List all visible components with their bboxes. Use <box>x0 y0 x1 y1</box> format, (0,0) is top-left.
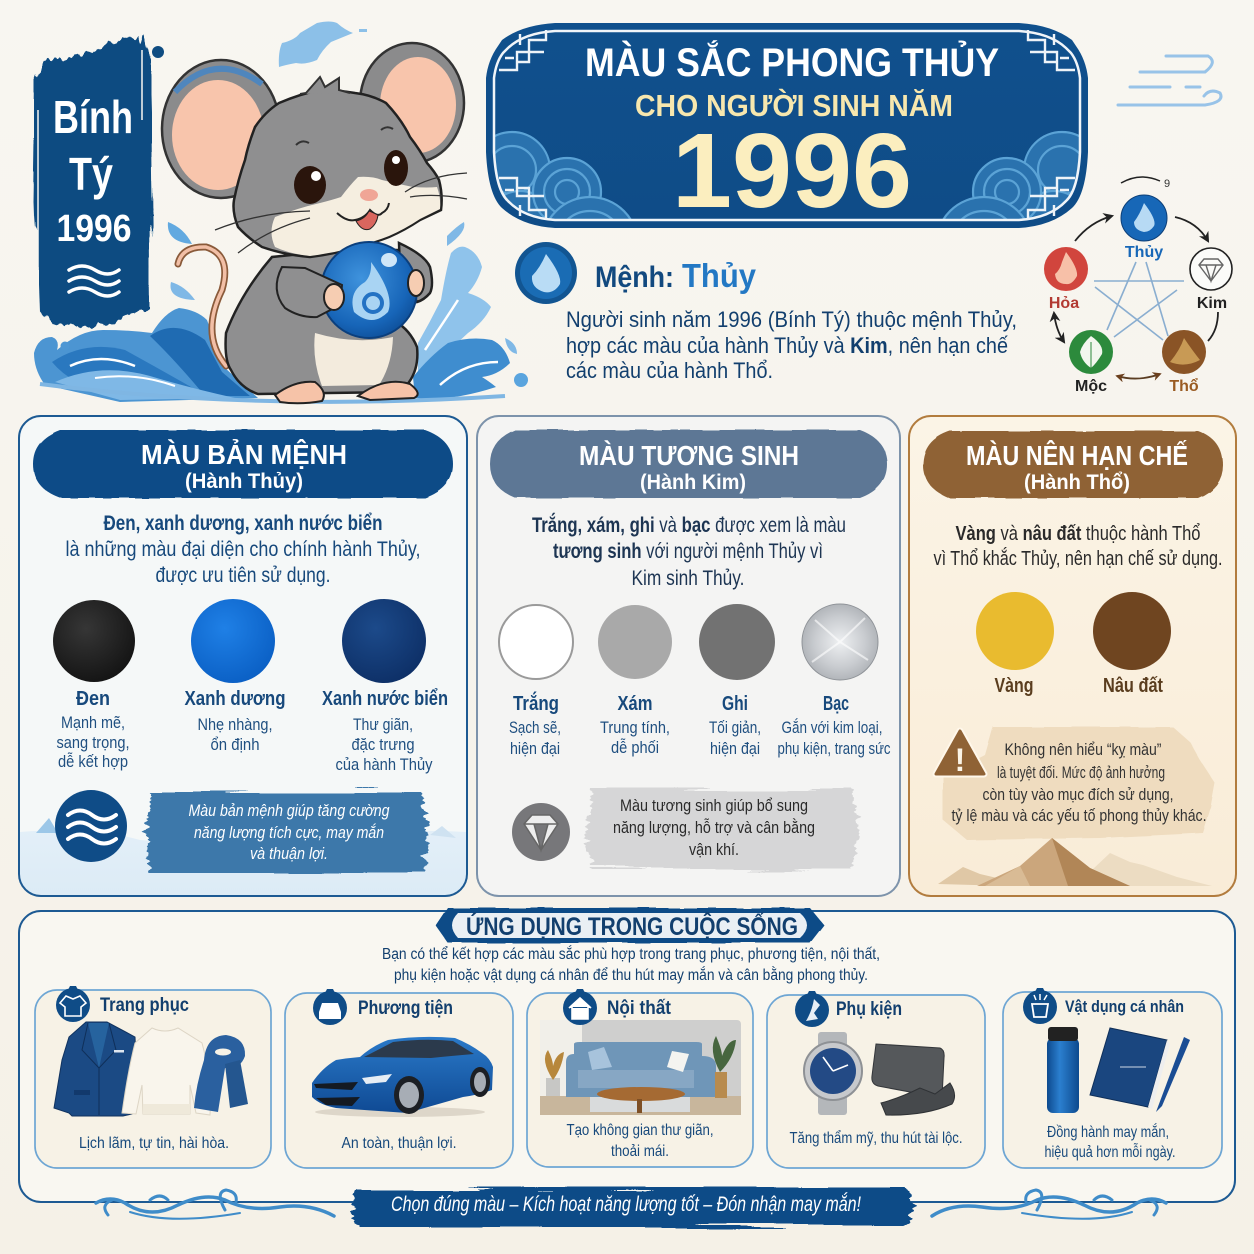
heading <box>490 430 887 498</box>
star lines <box>1094 262 1184 340</box>
card: phụ kiện: Phụ kiện <box>836 999 902 1020</box>
title banner: MÀU SẮC PHONG THỦY <box>585 39 999 85</box>
brows <box>296 127 393 145</box>
heading: (Hành Kim) <box>640 471 746 494</box>
title banner: 1996 <box>672 112 912 230</box>
right arm <box>399 243 432 302</box>
callout: Không nên hiểu “kỵ màu” <box>1004 741 1162 759</box>
wallet <box>872 1044 944 1098</box>
swatch: Vàng <box>976 592 1054 697</box>
swatch: Xám: Xám <box>618 693 652 715</box>
cloud pattern <box>495 130 1079 219</box>
corner frets <box>499 30 1075 220</box>
swatch: Xanh nước biển: đặc trưng <box>352 735 414 754</box>
menh Thuy block: Mệnh: <box>595 261 674 294</box>
icon: house <box>563 989 597 1025</box>
icon: mountains <box>938 838 1212 886</box>
panel: ứng dụng trong cuộc sống <box>19 908 1235 1202</box>
callout: là tuyệt đối. Mức độ ảnh hưởng <box>997 764 1165 782</box>
paragraph: Người sinh năm 1996 (Bính Tý) thuộc mệnh Thủy, <box>566 307 1017 332</box>
text block: là những màu đại diện cho chính hành Thủy, <box>66 538 420 561</box>
icon: warning <box>936 731 984 778</box>
card: nội thất <box>527 989 753 1167</box>
icon: shirt <box>56 986 90 1022</box>
paragraph: hợp các màu của hành Thủy và Kim, nên hạn chế <box>566 333 1008 358</box>
element: Kim <box>1190 248 1232 312</box>
cycle arrows <box>1054 216 1218 379</box>
paragraph <box>566 307 1017 383</box>
callout: tỷ lệ màu và các yếu tố phong thủy khác. <box>952 807 1206 825</box>
element: Hỏa <box>1044 247 1088 312</box>
footer scroll left <box>96 1190 334 1219</box>
swatch: Vàng: Vàng <box>994 675 1034 697</box>
paws <box>275 267 424 403</box>
card: nội thất: thoải mái. <box>611 1143 669 1160</box>
bottle <box>1047 1027 1079 1113</box>
callout <box>586 788 858 868</box>
notebook <box>1090 1028 1170 1109</box>
element: Thổ: Thổ <box>1169 377 1199 395</box>
swatch: Trắng: Sạch sẽ, <box>509 718 561 737</box>
swatch: Xám <box>598 605 672 757</box>
heading: (Hành Thổ) <box>1024 471 1130 494</box>
text block <box>66 512 420 587</box>
swatch: Đen: dễ kết hợp <box>58 752 128 771</box>
card: nội thất: Nội thất <box>607 998 672 1019</box>
swatch: Xanh nước biển: của hành Thủy <box>336 755 433 774</box>
paragraph: các màu của hành Thổ. <box>566 358 773 383</box>
swatch: Xanh nước biển: Thư giãn, <box>353 715 413 734</box>
top mark <box>1121 177 1160 183</box>
swatch: Ghi: Ghi <box>722 693 748 715</box>
swatch: Ghi: hiện đại <box>710 739 760 758</box>
ears <box>162 43 464 198</box>
panel: màu tương sinh <box>477 416 900 896</box>
five elements diagram <box>1044 177 1232 395</box>
callout: Màu bản mệnh giúp tăng cường <box>188 801 390 820</box>
icon: accessory <box>795 991 829 1027</box>
menh Thuy block: Thủy <box>682 257 757 294</box>
orb <box>321 242 417 338</box>
card: phụ kiện: Tăng thẩm mỹ, thu hút tài lộc. <box>790 1129 962 1147</box>
menh Thuy block <box>515 242 1017 383</box>
swatch: Nâu đất <box>1093 592 1171 697</box>
whiskers <box>215 173 467 253</box>
card: trang phục: Lịch lãm, tự tin, hài hòa. <box>79 1135 229 1152</box>
five elements diagram: 9 <box>1164 178 1170 190</box>
callout: năng lượng tích cực, may mắn <box>194 823 384 842</box>
swatch: Nâu đất: Nâu đất <box>1103 675 1163 697</box>
card: nội thất: Tạo không gian thư giãn, <box>566 1122 714 1139</box>
swatch: Xám: Trung tính, <box>600 718 670 737</box>
tail <box>178 247 226 366</box>
callout: năng lượng, hỗ trợ và cân bằng <box>613 818 815 837</box>
footer banner <box>352 1188 912 1226</box>
card: trang phục: Trang phục <box>100 995 189 1016</box>
heading: MÀU NÊN HẠN CHẾ <box>966 440 1188 471</box>
element: Hỏa: Hỏa <box>1049 295 1079 312</box>
swatch: Trắng: Trắng <box>513 691 559 715</box>
swatch: Xanh nước biển <box>322 599 448 774</box>
heading <box>923 431 1223 498</box>
eyes <box>294 150 408 204</box>
swatch: Xanh dương: ổn định <box>210 735 260 754</box>
jacket <box>54 1022 136 1116</box>
swatch: Đen <box>53 600 135 771</box>
title banner: CHO NGƯỜI SINH NĂM <box>635 87 953 123</box>
swatch: Ghi: Tối giản, <box>709 718 761 737</box>
water waves <box>34 22 528 402</box>
living room picture <box>540 1020 741 1115</box>
bracelet <box>881 1083 955 1115</box>
card: phương tiện: Phương tiện <box>358 998 453 1019</box>
swatch: Đen: Mạnh mẽ, <box>61 713 125 732</box>
text block: phụ kiện hoặc vật dụng cá nhân để thu hút may mắn và cân bằng phong thủy. <box>394 967 868 984</box>
heading: MÀU TƯƠNG SINH <box>579 440 799 471</box>
swatch: Bạc: phụ kiện, trang sức <box>778 739 891 758</box>
card: vật dụng cá nhân: Đồng hành may mắn, <box>1047 1122 1169 1141</box>
element: Thủy <box>1121 195 1167 261</box>
icon: cup <box>1023 988 1057 1024</box>
icon: water waves <box>69 266 119 296</box>
title banner <box>486 23 1088 228</box>
card: vật dụng cá nhân: hiệu quả hơn mỗi ngày. <box>1044 1142 1176 1161</box>
swatch: Xám: dễ phối <box>611 738 659 757</box>
element: Kim: Kim <box>1197 295 1227 312</box>
swatch: Trắng: hiện đại <box>510 739 560 758</box>
element: Mộc: Mộc <box>1075 378 1107 395</box>
card: vật dụng cá nhân <box>1003 988 1222 1168</box>
footer scroll right <box>932 1190 1166 1219</box>
belly <box>314 333 393 386</box>
text block <box>382 946 880 984</box>
pen <box>1156 1037 1190 1112</box>
body <box>226 250 417 394</box>
sweater <box>122 1028 210 1115</box>
text block: tương sinh với người mệnh Thủy vì <box>553 540 823 563</box>
card: phụ kiện <box>767 991 985 1168</box>
swatch: Đen: Đen <box>76 688 110 710</box>
footer banner: Chọn đúng màu – Kích hoạt năng lượng tốt – Đón nhận may mắn! <box>391 1193 861 1216</box>
banner: Bính Tý 1996 <box>34 35 164 328</box>
illustration: mouse holding a water orb on waves <box>34 22 528 403</box>
card: phương tiện: An toàn, thuận lợi. <box>342 1135 456 1152</box>
heading: MÀU BẢN MỆNH <box>141 438 347 470</box>
icon: car <box>313 989 347 1025</box>
element: Thủy: Thủy <box>1125 244 1163 261</box>
swatch: Xanh nước biển: Xanh nước biển <box>322 688 448 710</box>
nose and mouth <box>337 189 389 230</box>
element: Thổ <box>1162 330 1206 395</box>
card: phương tiện <box>285 989 513 1168</box>
swatch: Xanh dương: Nhẹ nhàng, <box>198 715 272 734</box>
swatch: Xanh dương <box>184 599 286 754</box>
icon: diamond badge <box>512 803 570 861</box>
swatch: Đen: sang trọng, <box>56 733 130 752</box>
swatch: Bạc: Bạc <box>823 693 849 715</box>
swatch: Xanh dương: Xanh dương <box>184 688 286 710</box>
panel: màu bản mệnh <box>19 416 467 896</box>
text block: Trắng, xám, ghi và bạc được xem là màu <box>532 513 846 537</box>
swatch: Ghi <box>699 604 775 758</box>
element: Mộc <box>1069 330 1113 395</box>
car <box>312 1037 493 1117</box>
swatch: Bạc <box>778 604 891 758</box>
swatch: Trắng <box>499 605 573 758</box>
head <box>234 90 442 257</box>
text block: Vàng và nâu đất thuộc hành Thổ <box>956 523 1200 545</box>
banner: Bính Tý 1996: 1996 <box>56 208 132 250</box>
scarf <box>194 1035 248 1112</box>
text block: Bạn có thể kết hợp các màu sắc phù hợp trong trang phục, phương tiện, nội thất, <box>382 946 880 963</box>
swatch: Bạc: Gắn với kim loại, <box>782 718 882 737</box>
icon: warning: ! <box>955 742 965 778</box>
heading: (Hành Thủy) <box>185 470 303 493</box>
callout: Màu tương sinh giúp bổ sung <box>620 796 808 815</box>
text block <box>532 513 846 590</box>
card: vật dụng cá nhân: Vật dụng cá nhân <box>1065 997 1184 1016</box>
heading <box>436 908 824 943</box>
icon: water drop <box>515 242 577 304</box>
watch <box>804 1032 862 1115</box>
icon: wave badge <box>55 790 127 862</box>
text block: được ưu tiên sử dụng. <box>156 564 330 587</box>
banner: Bính Tý 1996: Tý <box>69 148 113 200</box>
card: trang phục <box>35 986 271 1168</box>
text block: Đen, xanh dương, xanh nước biển <box>104 512 382 535</box>
icon: clouds top right <box>1118 56 1221 105</box>
callout <box>943 727 1215 840</box>
callout: vận khí. <box>689 840 739 859</box>
panel: màu nên hạn chế <box>909 416 1236 896</box>
text block <box>934 523 1222 570</box>
text block: Kim sinh Thủy. <box>632 567 744 590</box>
callout: và thuận lợi. <box>250 844 328 863</box>
callout: còn tùy vào mục đích sử dụng, <box>982 786 1174 804</box>
hair tuft <box>300 77 350 94</box>
heading <box>33 430 453 498</box>
callout <box>146 792 428 872</box>
muzzle <box>272 177 440 256</box>
heading: ỨNG DỤNG TRONG CUỘC SỐNG <box>466 911 798 941</box>
white frame <box>494 31 1080 220</box>
banner: Bính Tý 1996: Bính <box>53 91 133 143</box>
